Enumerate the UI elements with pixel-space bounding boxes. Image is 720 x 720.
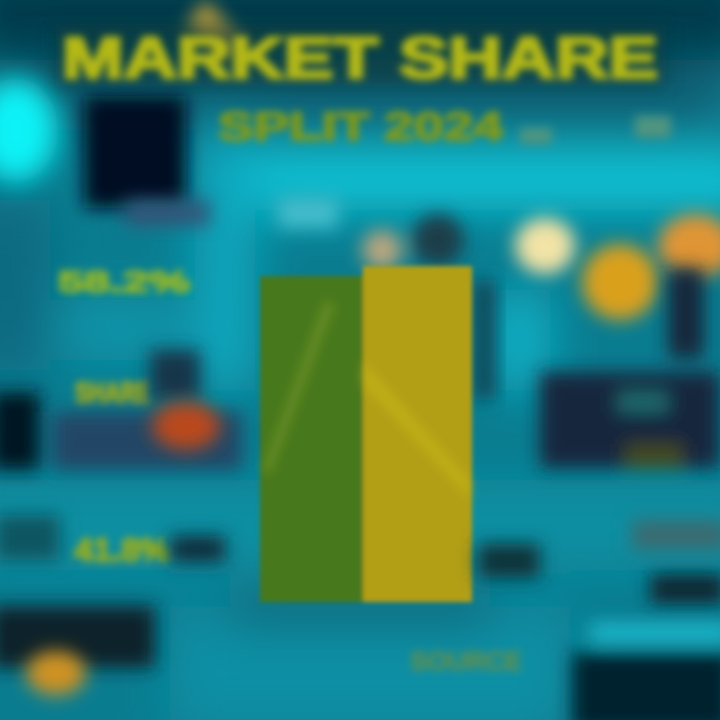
- bar: yellow: [363, 266, 472, 602]
- bar: green: [260, 276, 363, 602]
- figure right: [540, 268, 720, 468]
- label: upper left: [125, 200, 210, 226]
- title backing: [56, 24, 666, 86]
- label: green left: 58.2%: [58, 266, 190, 299]
- glow: orange light top: [185, 0, 250, 60]
- bar shadow: [472, 280, 496, 400]
- small marks top right: [520, 116, 671, 144]
- icon above bars: [362, 214, 464, 270]
- dark panel bottom left: [0, 606, 155, 668]
- panel bottom right: [572, 622, 720, 720]
- label: lower left: 41.8%: [74, 532, 170, 568]
- title: SPLIT 2024: [218, 105, 504, 149]
- dark panel top left: [84, 96, 186, 208]
- title: [62, 26, 658, 149]
- title: MARKET SHARE: [62, 26, 658, 91]
- dark tag right of bars: [478, 544, 540, 578]
- bar chart: [260, 266, 472, 602]
- dark panel left: [0, 350, 242, 470]
- dark tag lower left: [0, 515, 225, 562]
- label: yellow-green left: SHARE: [75, 377, 150, 410]
- icon: orange badge: [26, 651, 86, 695]
- panels right: [632, 520, 720, 604]
- label: upper centre: [278, 198, 338, 228]
- highlight: yellow streak: [363, 360, 470, 500]
- glow: cyan light left: [0, 78, 58, 182]
- label: bottom centre: SOURCE: [410, 646, 522, 676]
- glow: pale sun: [515, 218, 575, 274]
- highlight: green streak: [262, 300, 335, 475]
- glow: orange sun: [582, 244, 658, 320]
- icon: red orange blob: [152, 402, 220, 450]
- glow: orange right: [658, 214, 720, 278]
